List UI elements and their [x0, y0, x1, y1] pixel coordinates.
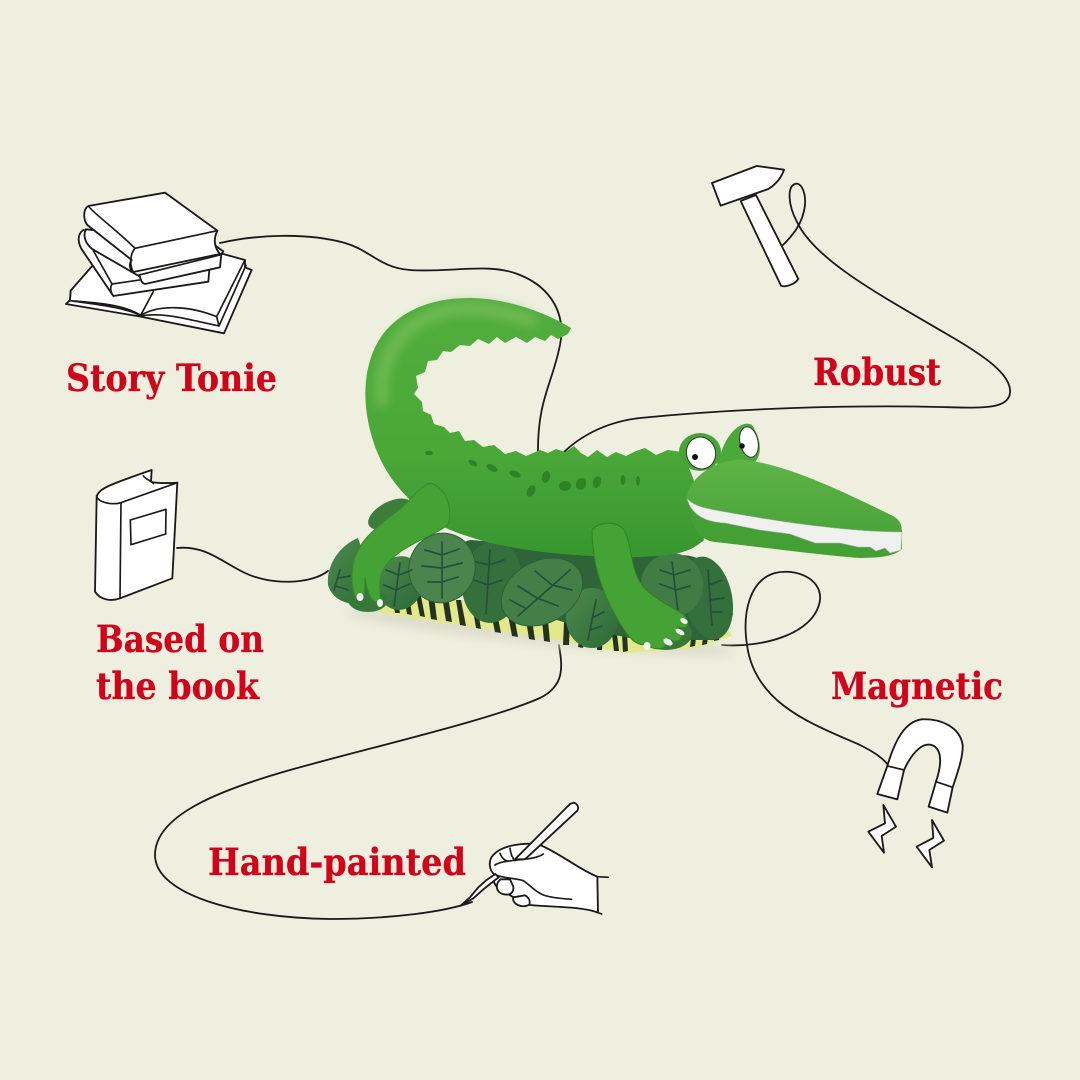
leaf veins	[422, 542, 462, 598]
shadow	[345, 600, 735, 664]
far eye	[715, 424, 761, 475]
leaves	[328, 492, 740, 648]
connector: magnet to crocodile	[722, 572, 888, 765]
connector: books to crocodile	[220, 236, 561, 456]
icon: hammer	[712, 166, 798, 286]
knuckle and thumb lines	[495, 848, 608, 914]
label: Based on the book	[96, 617, 264, 708]
label: Hand-painted: Hand-painted	[208, 840, 466, 884]
crocodile figure	[328, 298, 902, 664]
striped base	[358, 596, 732, 653]
tail highlight	[382, 308, 530, 400]
label: Robust: Robust	[813, 350, 941, 394]
brush handle	[515, 803, 578, 859]
upper snout	[687, 460, 902, 532]
back of hand	[490, 844, 598, 913]
label: Based on the book: the book	[96, 664, 260, 708]
label: Story Tonie: Story Tonie	[66, 356, 277, 400]
label: Based on the book: Based on	[96, 617, 264, 661]
connector: book to crocodile	[177, 548, 328, 582]
icon: stack of books	[66, 193, 252, 333]
toenails	[356, 593, 689, 650]
brush tip	[461, 874, 499, 906]
lower jaw	[688, 500, 902, 558]
connector: brush to crocodile	[155, 645, 561, 919]
paw rests	[640, 618, 692, 650]
icon: magnet with sparks	[868, 719, 963, 867]
hind leg	[352, 483, 450, 602]
front leg	[592, 523, 688, 649]
fingers	[497, 879, 530, 906]
connector: hammer to crocodile	[560, 184, 1010, 456]
icon: book	[95, 470, 177, 600]
teeth	[687, 499, 902, 553]
leaf backing mass	[375, 540, 733, 640]
body and tail	[365, 298, 704, 557]
back scutes	[425, 451, 640, 498]
far leaf behind body	[363, 492, 417, 536]
label: Magnetic: Magnetic	[831, 664, 1003, 708]
icon: hand holding brush	[461, 803, 608, 914]
near eye	[679, 433, 721, 472]
